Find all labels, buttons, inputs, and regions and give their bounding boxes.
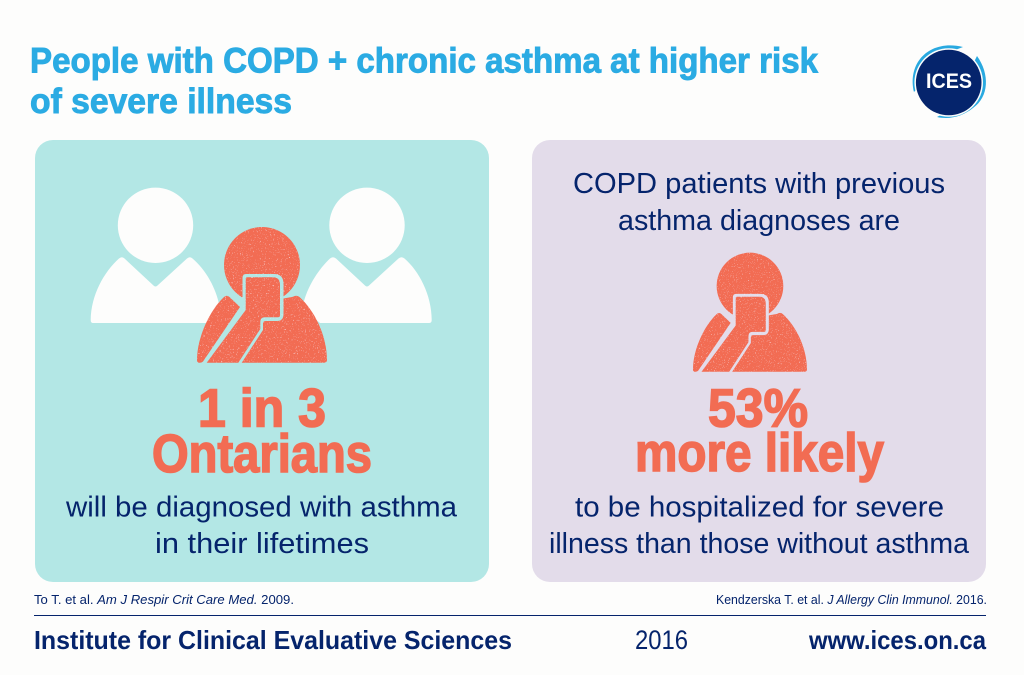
body text: in their lifetimes xyxy=(155,528,369,560)
logo: ICES xyxy=(913,45,986,118)
body text: will be diagnosed with asthma xyxy=(65,492,458,524)
panel: 1 in 3 Ontarians xyxy=(35,140,489,582)
footer: year: 2016 xyxy=(635,625,688,655)
panel: 53% more likely xyxy=(532,140,986,582)
body text xyxy=(549,492,970,560)
body text xyxy=(65,492,458,560)
citation left: To T. et al. Am J Respir Crit Care Med. 2009. xyxy=(34,592,294,607)
footer: institute name: Institute for Clinical Evaluative Sciences xyxy=(34,625,512,655)
big number: 53%: 53% xyxy=(708,378,808,438)
intro text: asthma diagnoses are xyxy=(618,205,900,237)
title xyxy=(30,42,819,121)
title: People with COPD + chronic asthma at higher risk xyxy=(30,42,819,80)
logo: ICES: ICES xyxy=(926,69,972,93)
body text: illness than those without asthma xyxy=(549,528,970,560)
big label: Ontarians: Ontarians xyxy=(152,424,372,484)
icon: white person right xyxy=(304,188,432,323)
icon: coral person xyxy=(197,227,327,363)
big label: more likely: more likely xyxy=(635,423,884,483)
intro text xyxy=(573,168,945,237)
footer: website: www.ices.on.ca xyxy=(808,625,986,655)
intro text: COPD patients with previous xyxy=(573,168,945,200)
icon: coral person xyxy=(693,253,807,372)
citation right: Kendzerska T. et al. J Allergy Clin Immunol. 2016. xyxy=(716,592,987,607)
body text: to be hospitalized for severe xyxy=(575,492,944,524)
title: of severe illness xyxy=(30,82,292,121)
big number: 1 in 3: 1 in 3 xyxy=(198,378,326,438)
icon: white person left xyxy=(91,188,220,323)
